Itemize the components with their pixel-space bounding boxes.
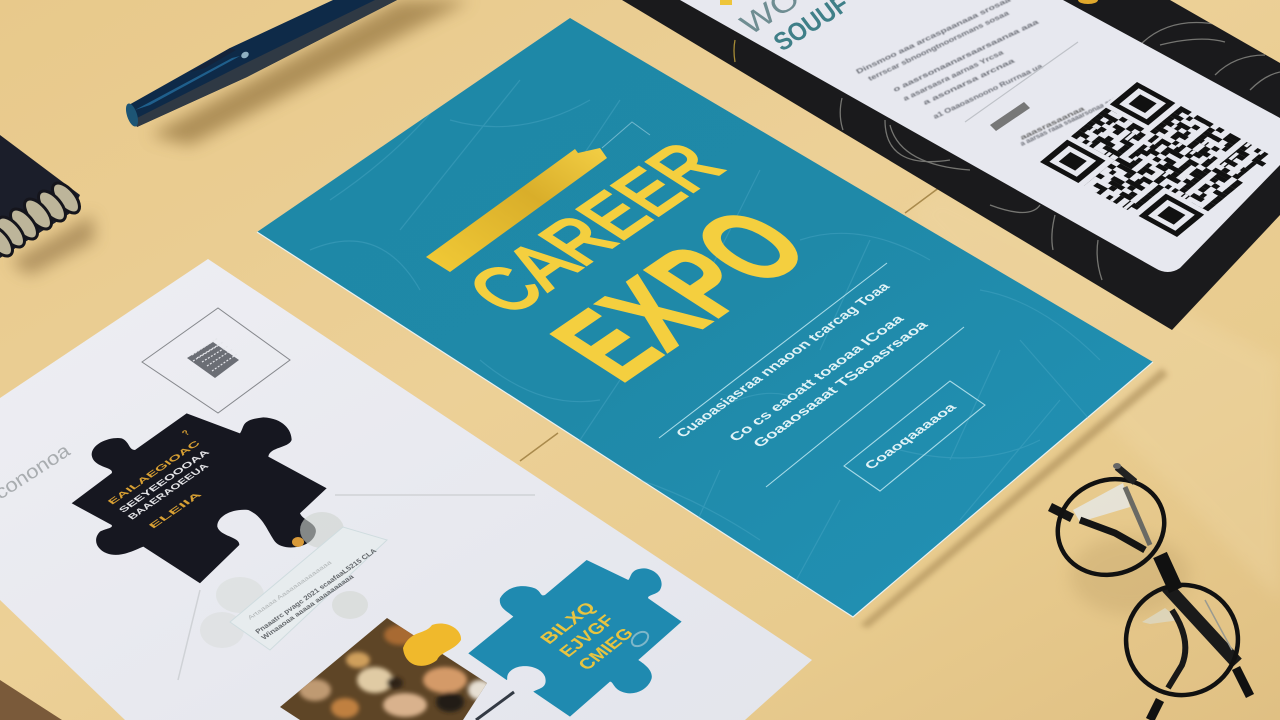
yellow highlight bar: [426, 148, 607, 272]
yellow puzzle lettering: BILXQ: [536, 599, 600, 647]
poster details text: Co cs eaoatt toaoaa ICoaa: [725, 312, 907, 444]
lens reflection bottom: [1142, 608, 1180, 624]
puzzle text: BAAERAOEEUA: [125, 461, 211, 521]
small pen on poster: [476, 692, 514, 720]
top lens rim: [1044, 464, 1178, 590]
bridge: [1160, 555, 1176, 590]
flyer body text: a asarsasra aarnas Yrcsa: [901, 48, 1006, 103]
QR code: [1035, 79, 1279, 240]
yellow puzzle lettering: [536, 599, 638, 673]
black card with QR flyer: [622, 0, 1280, 330]
flyer body text: a aarsas raaa ssaaarsonaa aaaa: [1018, 93, 1123, 148]
flyer heading: [734, 0, 854, 57]
flyer body text: terrscar sbnoongtnoorsmans sosaa: [866, 9, 1012, 83]
black puzzle piece: ?: [179, 428, 192, 437]
translucent info card: Artaaaaa Aaaaaaaaaaaaaa: [247, 560, 334, 621]
register button box: [844, 381, 985, 491]
spiral rings: [0, 178, 84, 261]
orange spot: [292, 537, 304, 547]
puzzle text: SEEYEEOOOAA: [116, 448, 212, 514]
QR finder pattern left: [1035, 135, 1115, 188]
QR texture breaks: [1048, 86, 1263, 231]
white flyer: [680, 0, 1280, 272]
divider lines: [659, 263, 964, 487]
yellow accents: [720, 0, 732, 5]
blue puzzle piece: [468, 560, 682, 717]
thin frame behind bar: [602, 122, 650, 148]
QR finder pattern top: [1103, 79, 1183, 132]
flyer body text: Dinsmoo aaa arcaspaanaaa srosaa: [854, 0, 1013, 76]
main blue Career Expo poster: [257, 18, 1153, 617]
poster scribble texture: [310, 60, 1100, 610]
flyer body text: a asonarsa arcnaa: [921, 56, 1017, 107]
translucent info card: Winaaoaa aaaaa aaaaaaaaaa: [260, 574, 356, 641]
card swirl pattern: [734, 22, 1280, 280]
grey text block: [990, 102, 1030, 131]
pen: [124, 0, 470, 145]
left white poster: [0, 259, 812, 720]
eyeglasses: [1044, 463, 1250, 720]
poster details text: [672, 280, 931, 450]
puzzle text: ELEIIA: [146, 490, 205, 530]
yellow puzzle lettering: EJVGF: [555, 612, 619, 660]
notebook with spiral binding: [0, 135, 95, 275]
flyer body text: aaasrasaanaa: [1018, 104, 1087, 142]
poster details text: Cuaoasiasraa nnaoon tcarcag Toaa: [672, 280, 893, 440]
photo of people: [280, 618, 487, 720]
flyer body text: [854, 0, 1123, 148]
translucent info card: Pnaaatrc pvagc 2021 scaafaaL5215 CLA: [254, 548, 378, 635]
puzzle text: [105, 438, 212, 530]
flyer body text: o aasrsonaanarsaarsaanaa aaa: [891, 17, 1041, 94]
faint rules: [178, 495, 535, 680]
bottom lens rim: [1114, 572, 1250, 708]
temple arms: [1050, 507, 1072, 518]
diamond frame with mini QR: [142, 308, 290, 413]
yellow puzzle tab: [403, 623, 461, 666]
yellow puzzle lettering: CMIEG: [574, 625, 638, 673]
flyer body text: a1 Oaaoasnoono Rurrnaa ua: [931, 62, 1045, 121]
black puzzle piece: [72, 413, 327, 583]
translucent info card: [200, 512, 387, 650]
puzzle text: EAILAEGIOAC: [105, 438, 203, 506]
poster details text: Goaaosaaat TSaoasrsaoa: [749, 318, 931, 450]
shadow under main poster: [860, 368, 1168, 628]
lens reflection top: [1073, 483, 1130, 522]
QR finder pattern bottom: [1131, 187, 1211, 240]
title: EXPO: EXPO: [523, 190, 838, 400]
register button box: Coaoqaaaaoa: [861, 400, 960, 472]
title: CAREER: CAREER: [449, 130, 740, 326]
